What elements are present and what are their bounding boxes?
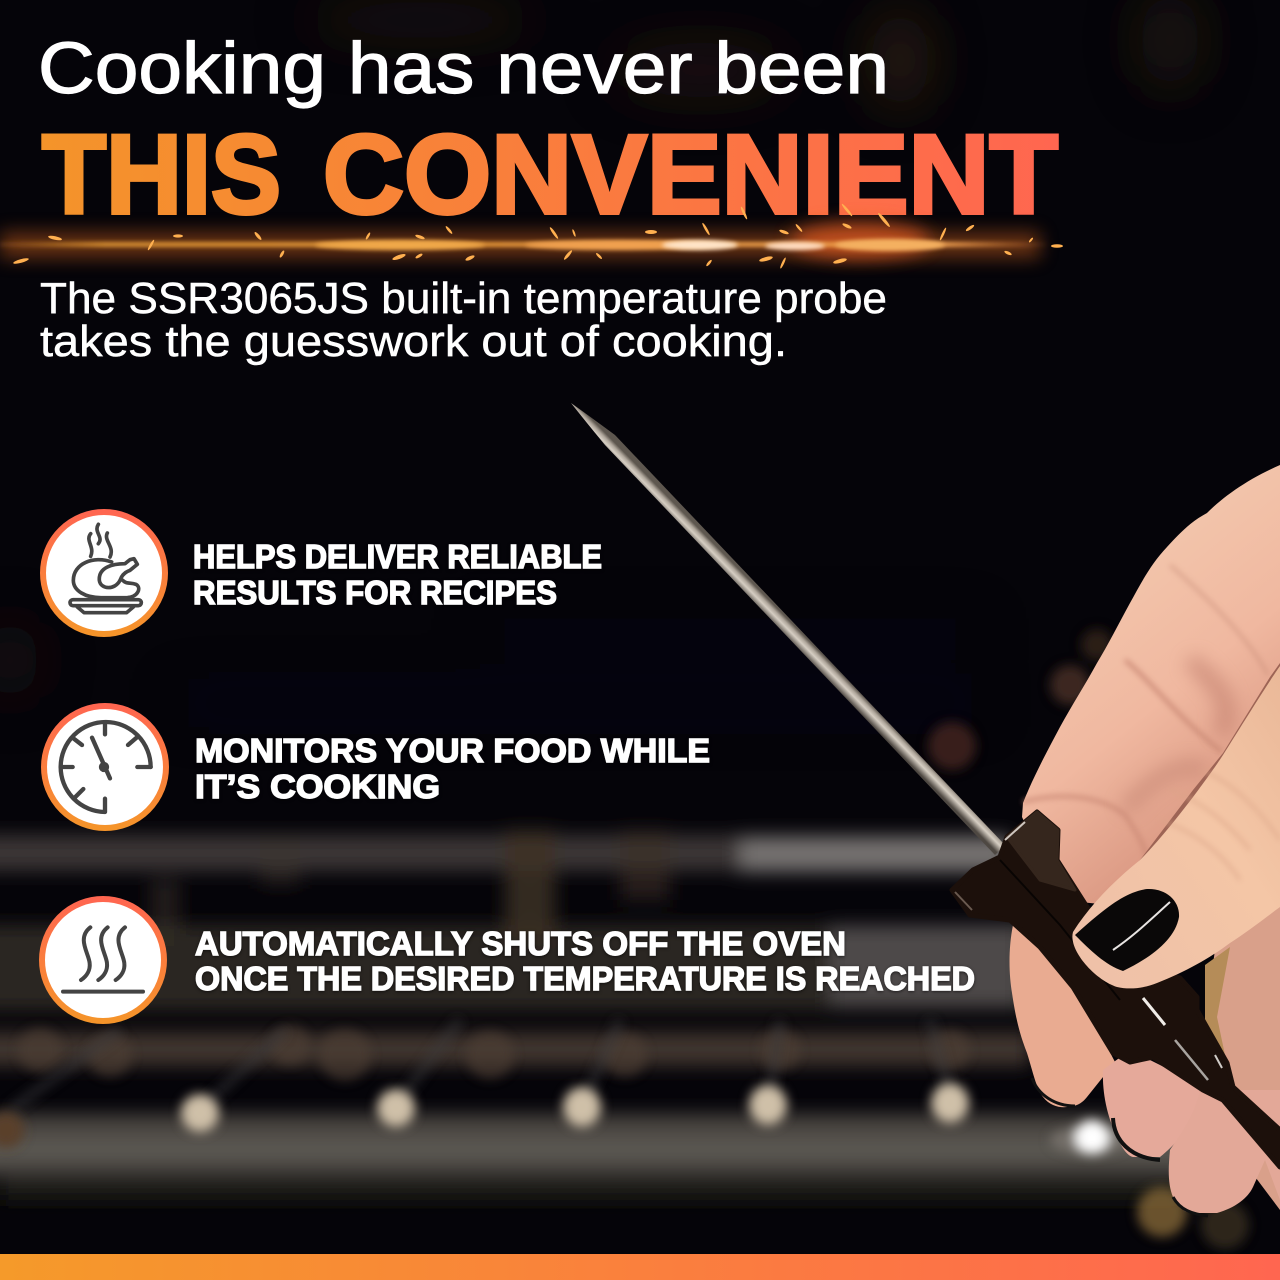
rack streaks bbox=[10, 1020, 950, 1110]
title line 1: Cooking has never been bbox=[38, 29, 889, 109]
text: AUTOMATICALLY SHUTS OFF THE OVEN bbox=[195, 925, 846, 962]
title line 2: THIS bbox=[42, 112, 281, 237]
text bbox=[195, 732, 710, 805]
probe handle bbox=[952, 812, 1280, 1167]
text: HELPS DELIVER RELIABLE bbox=[193, 538, 602, 575]
index finger creases and shading bbox=[1023, 565, 1268, 858]
fingernail edges bbox=[1032, 1078, 1208, 1216]
icon: heat waves bbox=[42, 899, 164, 1021]
icon: roast chicken bbox=[43, 512, 165, 634]
subtitle bbox=[40, 274, 887, 366]
gap behind handle bbox=[1205, 947, 1230, 1055]
text bbox=[193, 538, 602, 611]
feature 1 bbox=[43, 512, 602, 634]
thumbnail bbox=[1075, 889, 1179, 971]
feature 2 bbox=[44, 706, 710, 828]
bottom gradient bar bbox=[0, 1254, 1280, 1280]
lower finger 1 bbox=[1010, 925, 1115, 1107]
light dots bbox=[0, 629, 1249, 1249]
hand holding probe bbox=[952, 465, 1280, 1216]
probe needle bbox=[571, 403, 1005, 855]
subtitle: takes the guesswork out of cooking. bbox=[40, 317, 787, 366]
burner glow blobs bbox=[18, 1025, 970, 1081]
dark crease between finger and thumb bbox=[1103, 663, 1280, 897]
lower finger 3 bbox=[1169, 1090, 1280, 1213]
text: ONCE THE DESIRED TEMPERATURE IS REACHED bbox=[195, 960, 975, 997]
index finger and back of hand bbox=[1022, 465, 1280, 905]
text: IT’S COOKING bbox=[195, 768, 440, 805]
palm below thumb bbox=[1205, 890, 1280, 1210]
spark divider bbox=[0, 203, 1063, 269]
subtitle: The SSR3065JS built-in temperature probe bbox=[40, 274, 887, 323]
thumb lines bbox=[1160, 770, 1280, 880]
feature 3 bbox=[42, 899, 975, 1021]
text: RESULTS FOR RECIPES bbox=[193, 574, 557, 611]
thumb bbox=[1072, 666, 1280, 988]
icon: temperature gauge bbox=[44, 706, 166, 828]
title line 2: CONVENIENT bbox=[323, 112, 1058, 237]
text: MONITORS YOUR FOOD WHILE bbox=[195, 732, 710, 769]
text bbox=[195, 925, 975, 997]
lower finger 2 bbox=[1103, 1050, 1200, 1157]
